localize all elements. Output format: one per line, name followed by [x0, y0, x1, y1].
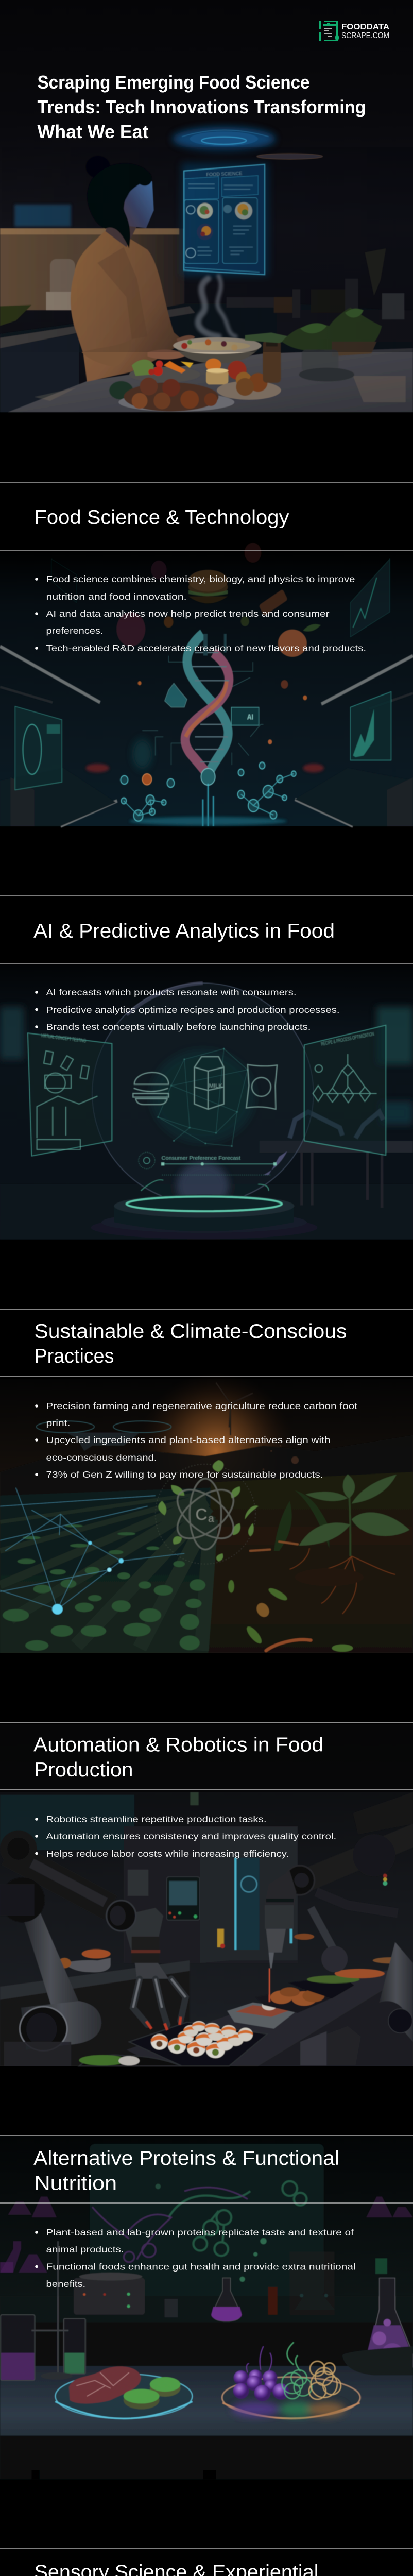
bullet list: AI forecasts which products resonate with consumers. — [46, 987, 297, 997]
heading: Alternative Proteins & Functional — [33, 2147, 339, 2170]
illustration: holographic sphere with food products: RECIPE & PROCESS OPTIMIZATION — [321, 1031, 375, 1047]
illustration: holographic sphere with food products: Consumer Preference Forecast — [162, 1156, 240, 1161]
illustration: DNA helix lab — [0, 543, 413, 826]
illustration: holographic sphere with food products — [0, 964, 413, 1240]
bullet list: benefits. — [46, 2279, 85, 2289]
heading: Food Science & Technology — [34, 506, 289, 529]
hero kitchen illustration — [0, 0, 413, 412]
heading — [33, 2147, 339, 2195]
bullet list: Plant-based and lab-grown proteins replicate taste and texture of — [46, 2227, 354, 2238]
panel: Automation & Robotics — [0, 1722, 413, 2066]
bullet list: Brands test concepts virtually before launching products. — [46, 1022, 311, 1032]
bullet list: AI and data analytics now help predict trends and consumer — [46, 608, 330, 619]
bullet list — [35, 987, 339, 1032]
panel: AI & Predictive Analytics — [0, 896, 413, 1240]
bullet list: 73% of Gen Z willing to pay more for sustainable products. — [46, 1469, 323, 1480]
panel: hero — [0, 0, 413, 412]
panel: Alternative Proteins & Functional Nutrition — [0, 2136, 413, 2479]
bullet list: Precision farming and regenerative agriculture reduce carbon foot — [46, 1401, 357, 1411]
illustration: smart field and regenerative soil — [0, 1372, 413, 1653]
bullet list: Food science combines chemistry, biology, and physics to improve — [46, 574, 355, 584]
title: What We Eat — [37, 121, 149, 142]
bullet list: Predictive analytics optimize recipes and production processes. — [46, 1005, 340, 1015]
illustration: lab bench with petri dishes — [0, 2136, 413, 2479]
illustration: robot arms handling sushi — [0, 1724, 413, 2066]
bullet list: nutrition and food innovation. — [46, 591, 186, 602]
heading — [34, 1320, 347, 1367]
illustration: smart field and regenerative soil: C — [196, 1505, 207, 1523]
bullet list — [35, 1401, 357, 1480]
bullet list — [35, 574, 366, 653]
panel: Sensory Science & Experiential Dining — [0, 2549, 413, 2576]
divider lines — [0, 896, 413, 963]
illustration: holographic sphere with food products: VIRTUAL CONCEPT TESTING — [41, 1033, 87, 1044]
title: Trends: Tech Innovations Transforming — [37, 96, 366, 117]
panel: Food Science & Technology — [0, 483, 413, 826]
divider lines — [0, 2549, 413, 2576]
bullet list: Functional foods enhance gut health and provide extra nutritional — [46, 2262, 355, 2272]
hero kitchen illustration: FOOD SCIENCE — [206, 171, 243, 177]
bullet list: eco-conscious demand. — [46, 1452, 157, 1463]
logo: FoodData Scrape top right: FOODDATA — [341, 23, 389, 31]
bullet list: Helps reduce labor costs while increasing efficiency. — [46, 1849, 289, 1859]
logo: FoodData Scrape top right — [319, 21, 389, 41]
heading: Practices — [34, 1345, 114, 1367]
divider lines — [0, 1722, 413, 1790]
heading: Nutrition — [34, 2172, 117, 2195]
bullet list: Tech-enabled R&D accelerates creation of new flavors and products. — [46, 643, 366, 653]
bullet list: Upcycled ingredients and plant-based alternatives align with — [46, 1435, 331, 1445]
panel: Sustainable & Climate-Conscious Practices — [0, 1309, 413, 1653]
illustration: holographic sphere with food products: MILK — [209, 1083, 222, 1089]
bullet list: print. — [46, 1418, 70, 1428]
bullet list: animal products. — [46, 2244, 124, 2255]
illustration: smart field and regenerative soil: a — [208, 1513, 214, 1524]
illustration: DNA helix lab: AI — [247, 713, 253, 721]
bullet list: Automation ensures consistency and improves quality control. — [46, 1831, 336, 1841]
logo: FoodData Scrape top right: SCRAPE.COM — [341, 31, 389, 40]
title — [37, 72, 366, 142]
heading: Sustainable & Climate-Conscious — [34, 1320, 347, 1343]
divider lines — [0, 1309, 413, 1377]
title: Scraping Emerging Food Science — [37, 72, 310, 93]
icon: menu with fork and spoon — [319, 21, 339, 41]
heading: Automation & Robotics in Food — [33, 1734, 323, 1756]
divider lines — [0, 2136, 413, 2203]
bullet list — [35, 2227, 355, 2289]
bullet list: preferences. — [46, 625, 103, 636]
heading: AI & Predictive Analytics in Food — [33, 920, 335, 942]
heading: Production — [34, 1759, 133, 1781]
bullet list — [35, 1814, 336, 1859]
bullet list: Robotics streamline repetitive production tasks. — [46, 1814, 267, 1824]
divider lines — [0, 483, 413, 550]
heading — [33, 1734, 323, 1781]
